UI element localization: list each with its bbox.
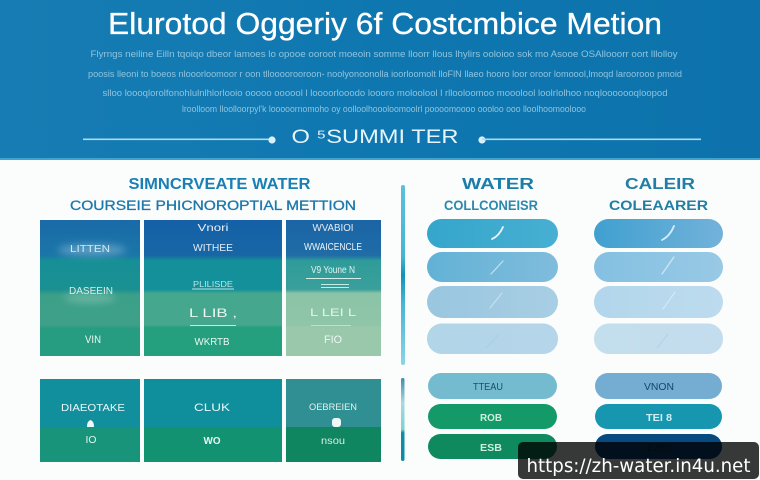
- watermark: [518, 442, 759, 479]
- table column 3: WVABIOI: [312, 223, 354, 234]
- status pills: caler: VNON: [644, 382, 674, 393]
- table column 2: [144, 220, 282, 356]
- intro paragraph: poosis lleoni to boeos nlooorloomoor r oon tlloooorooroon- noolyonoonolla ioorloomolt lloFlN llaeo hooro loor oroor lomoool,lmoqd laroorooo pmoid: [88, 69, 682, 79]
- header banner: [0, 0, 760, 160]
- table column 2: WITHEE: [193, 242, 233, 254]
- panel: caler heading: CALEIR: [625, 176, 696, 193]
- table column 3: V9 Youne N: [311, 265, 355, 276]
- title: Elurotod Oggeriy 6f Costcmbice Metion: [108, 6, 662, 41]
- status pills: caler: [595, 373, 722, 459]
- status pills: water: TTEAU: [473, 382, 503, 393]
- vertical divider: upper: [401, 185, 405, 365]
- subheading divider: [83, 127, 701, 148]
- table column 3: [286, 220, 381, 356]
- status pills: water: [428, 373, 557, 459]
- panel: bottom table: [40, 379, 381, 462]
- table column 1: DASEEIN: [69, 286, 113, 297]
- pill list: water: [427, 219, 558, 354]
- table column 2: L LIB ,: [189, 306, 237, 320]
- panel: left heading: [70, 176, 356, 213]
- table column 1: LITTEN: [70, 244, 110, 255]
- panel: left heading: COURSEIE PHICNOROPTIAL METTION: [70, 198, 356, 213]
- subheading divider: O ⁵SUMMI TER: [292, 127, 458, 148]
- panel: left heading: SIMNCRVEATE WATER: [128, 176, 311, 193]
- table column 3: WWAICENCLE: [304, 242, 362, 253]
- table column 1: VIN: [85, 334, 101, 346]
- panel: water heading: [444, 176, 538, 213]
- panel: top table: [40, 220, 381, 356]
- bottom column 3: [286, 379, 381, 462]
- intro paragraph: slloo loooqlorolfonohlulnlhlorlooio ooooo oooool l loooorlooodo loooro moloolool l rllooloomoo mooolool loolrlolhoo noqlooooooqloopod: [102, 88, 668, 98]
- intro paragraph: [88, 49, 682, 114]
- table column 2: WKRTB: [194, 336, 230, 348]
- pill list: caler: [594, 219, 723, 354]
- bottom column 2: CLUK: [194, 402, 231, 414]
- bottom column 2: [144, 379, 282, 462]
- bottom column 1: IO: [86, 435, 97, 446]
- intro paragraph: lroolloom lloolloorpyl'k looooornomoho oy oolloolhoooloomoolrl poooomoooo oooloo ooo lloolhoomoolooo: [182, 104, 586, 114]
- bottom column 2: WO: [204, 435, 220, 447]
- icon: pen strokes: [486, 227, 503, 348]
- table column 1: [40, 220, 140, 356]
- watermark: https://zh-water.in4u.net: [526, 455, 750, 477]
- status pills: caler: E8I0: [647, 443, 672, 454]
- bottom column 3: nsou: [321, 436, 345, 447]
- status pills: caler: TEI 8: [646, 413, 672, 424]
- bottom column 1: [40, 379, 140, 462]
- status pills: water: ESB: [480, 443, 502, 454]
- bottom column 1: DIAEOTAKE: [61, 402, 125, 414]
- table column 2: Vnori: [198, 222, 228, 234]
- table column 3: L LEI L: [310, 307, 356, 319]
- table column 2: PLILISDE: [193, 280, 233, 289]
- panel: water heading: WATER: [462, 176, 535, 193]
- status pills: water: ROB: [480, 413, 502, 424]
- table column 3: FIO: [324, 334, 342, 346]
- icon: pen strokes: [657, 226, 675, 348]
- intro paragraph: Flyrngs neiline Eilln tqoiqo dbeor lamoes lo opooe ooroot moeoin somme lloorr llous lhylirs ooloioo sok mo Asooe OSAllooorr oort lllolloy: [90, 49, 678, 59]
- panel: caler heading: [609, 176, 708, 213]
- panel: water heading: COLLCONEISR: [444, 198, 538, 213]
- panel: caler heading: COLEAARER: [609, 198, 708, 213]
- bottom column 3: OEBREIEN: [309, 402, 357, 412]
- vertical divider: lower: [401, 378, 404, 461]
